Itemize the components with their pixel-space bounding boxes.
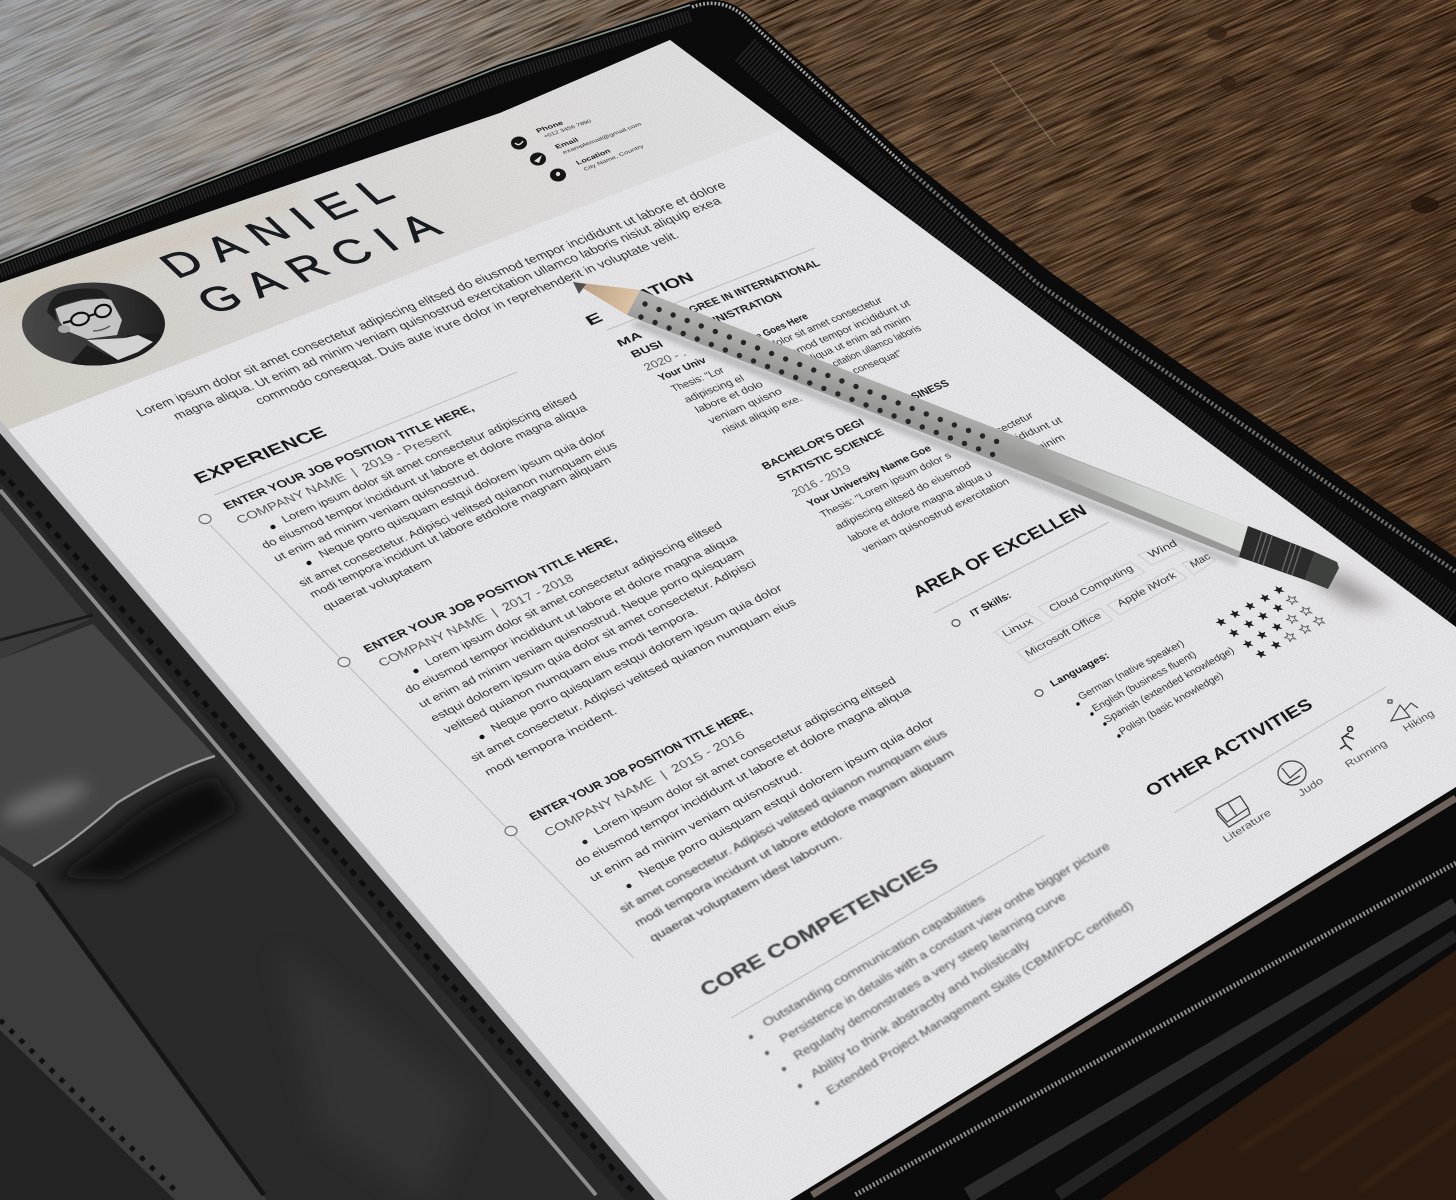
- heading: other activities: OTHER ACTIVITIES: [1142, 695, 1317, 800]
- bachelor's degree entry: adipiscing elitsed do eiusmod: [832, 460, 974, 532]
- job entry 2: ENTER YOUR JOB POSITION TITLE HERE,: [361, 533, 620, 655]
- intro paragraph: [133, 179, 729, 422]
- heading: core competencies: CORE COMPETENCIES: [696, 854, 943, 1001]
- activity labels: [1221, 707, 1437, 845]
- contact text: [535, 118, 646, 172]
- experience section: modi tempora incidunt ut labore etdolore magnam aliquam: [307, 454, 614, 600]
- bachelor's degree entry: veniam quisnostrud exercitation: [859, 476, 1011, 555]
- master's degree entry: Thesis: "Lor: [669, 365, 727, 394]
- portrait face: [55, 298, 122, 339]
- master's degree entry: 2020 - .: [641, 347, 689, 373]
- pencil eraser: [1305, 552, 1339, 589]
- text: Lorem ipsum dolor sit amet consectetur adipiscing elitsed: [279, 390, 580, 525]
- pencil shadow: [630, 320, 1393, 608]
- education section: [582, 257, 1068, 555]
- zipper edge: [0, 5, 690, 263]
- job entry 2: modi tempora incident.: [482, 705, 620, 778]
- core competencies section: [696, 840, 1136, 1105]
- master's degree entry: dolor sit amet consectetur: [768, 295, 885, 350]
- icon: location: [550, 168, 566, 182]
- paper underside edge: [812, 798, 1456, 1195]
- job entry 3: ut enim ad minim veniam quisnostrud.: [587, 764, 804, 884]
- master's degree entry: MA: [614, 329, 645, 349]
- experience section: Lorem ipsum dolor sit amet consectetur adipiscing elitsed: [422, 520, 725, 668]
- zipper fabric top: [0, 16, 690, 272]
- pencil barrel: [627, 290, 1249, 558]
- text: sit amet consectetur. Adipisci velitsed quianon numquam eius: [296, 439, 620, 589]
- skill pills: Microsoft Office: [1023, 610, 1103, 659]
- activity labels: Literature: [1221, 807, 1274, 845]
- bachelor's degree entry: labore et dolore magna aliqua u: [845, 467, 994, 544]
- skill pills: Apple iWork: [1114, 569, 1179, 609]
- master's degree entry: nisiut aliquip exe.: [719, 393, 804, 436]
- bachelor's degree entry: [760, 378, 1068, 555]
- activity labels: Running: [1342, 738, 1390, 770]
- job entry 2: [361, 520, 799, 778]
- master's degree entry: labore et dolo: [692, 378, 766, 415]
- zipper teeth: [692, 3, 906, 167]
- heading: education: ATION: [634, 269, 697, 303]
- bachelor's degree entry: cididunt ut: [1008, 415, 1066, 445]
- bachelor's degree entry: minim: [1031, 431, 1068, 454]
- skill pills: [994, 537, 1215, 663]
- master's degree entry: MINISTRATION: [702, 290, 785, 330]
- experience section: sit amet consectetur. Adipisci velitsed quianon numquam eius: [468, 596, 799, 764]
- bachelor's degree entry: nsectetur: [987, 410, 1036, 439]
- icon: judo: [1278, 761, 1306, 785]
- heading: education: E: [582, 310, 607, 329]
- experience section: do eiusmod tempor incididunt ut labore et dolore magna aliqua: [402, 532, 740, 696]
- skill pills: Wind: [1145, 537, 1180, 560]
- area of excellence section: [909, 501, 1326, 738]
- job entry 3: [527, 674, 957, 944]
- timeline dots: [199, 514, 517, 836]
- competencies list: [749, 840, 1136, 1105]
- portrait jacket: [70, 334, 162, 366]
- bachelor's degree entry: Thesis: "Lorem ipsum dolor s: [817, 450, 954, 520]
- star ratings: [1213, 584, 1326, 659]
- header band: [0, 40, 785, 433]
- left leather panels: [0, 418, 690, 1200]
- bullet circles: [952, 620, 1043, 696]
- master's degree entry: lo consequat": [839, 347, 905, 380]
- profile photo: [22, 282, 165, 366]
- bachelor's degree entry: STATISTIC SCIENCE: [775, 427, 887, 484]
- master's degree entry: usmod tempor incididunt ut: [783, 298, 913, 360]
- competencies list: Outstanding communication capabilities: [760, 892, 988, 1029]
- portrait mouth: [93, 326, 110, 331]
- portrait hair: [47, 288, 112, 322]
- job entry 1: COMPANY NAME | 2019 - Present: [234, 427, 454, 526]
- master's degree entry: BUSI: [628, 338, 666, 360]
- heading: experience: EXPERIENCE: [190, 424, 331, 487]
- skill pills: Linux: [999, 615, 1036, 639]
- portrait glasses: [63, 303, 112, 327]
- experience section: Neque porro quisquam estqui dolorem ipsum quia dolor: [316, 428, 609, 560]
- languages list: English (business fluent): [1090, 649, 1199, 714]
- lower zipper: [855, 863, 1456, 1195]
- master's degree entry: veniam quisno: [705, 386, 784, 426]
- text: Neque porro quisquam estqui dolorem ipsum quia dolor: [636, 714, 937, 880]
- other activities section: [1142, 695, 1437, 845]
- skill pills: Mac: [1187, 550, 1213, 570]
- activity labels: Judo: [1295, 774, 1326, 799]
- activity labels: Hiking: [1400, 707, 1437, 734]
- master's degree entry: citation ullamco laboris: [830, 323, 924, 370]
- master's degree entry: ne Goes Here: [748, 311, 811, 344]
- job entry 3: COMPANY NAME | 2015 - 2016: [542, 729, 748, 839]
- name: GARCIA: [187, 202, 464, 322]
- contact text: City Name, Country: [582, 143, 646, 172]
- bachelor's degree entry: BACHELOR'S DEGI: [760, 417, 867, 472]
- languages list: Spanish (extended knowledge): [1101, 645, 1237, 725]
- experience section: ut enim ad minim veniam quisnostrud. Neque porro quisquam: [416, 546, 747, 710]
- languages list: Languages:: [1047, 649, 1111, 689]
- name: [150, 166, 464, 322]
- portrait shirt: [87, 335, 153, 360]
- icon: hiking mountain: [1388, 700, 1418, 721]
- contact text: examplemail@gmail.com: [561, 122, 643, 156]
- pencil ferrule: [1239, 526, 1315, 580]
- job entry 1: quaerat voluptatem: [321, 556, 435, 613]
- competencies list: Regularly demonstrates a very steep learning curve: [791, 890, 1069, 1062]
- master's degree entry: [614, 257, 924, 436]
- job entry 1: [221, 390, 620, 613]
- contact details: [511, 118, 646, 182]
- master's degree entry: Your Univ: [656, 355, 709, 383]
- skill pills: Cloud Computing: [1047, 563, 1136, 615]
- contact text: Email: [554, 136, 582, 151]
- pencil: [573, 282, 1393, 608]
- text: modi tempora incidunt ut labore etdolore magnam aliquam: [632, 747, 957, 929]
- job entry 1: ut enim ad minim veniam quisnostrud.: [271, 465, 482, 564]
- text: Lorem ipsum dolor sit amet consectetur adipiscing elitsed: [591, 674, 899, 837]
- icon: phone: [511, 136, 527, 150]
- text: do eiusmod tempor incididunt ut labore et dolore magna aliqua: [259, 402, 590, 551]
- pencil grip dots: [641, 304, 998, 455]
- zipper fabric right: [745, 50, 1456, 612]
- job entry 3: ENTER YOUR JOB POSITION TITLE HERE,: [527, 705, 755, 823]
- name: DANIEL: [150, 166, 416, 285]
- master's degree entry: adipiscing el: [681, 372, 747, 405]
- IT skills label: IT Skills:: [967, 590, 1014, 619]
- pencil wood tip: [573, 282, 640, 315]
- languages list: German (native speaker): [1076, 638, 1187, 702]
- bachelor's degree entry: Your University Name Goe: [805, 443, 934, 509]
- section rules: [210, 248, 1386, 1018]
- master's degree entry: EGREE IN INTERNATIONAL: [679, 257, 823, 318]
- icon: literature book: [1216, 796, 1250, 827]
- contact text: Location: [575, 148, 613, 167]
- bachelor's degree entry: 2016 - 2019: [789, 462, 853, 499]
- pencil lead: [573, 282, 586, 294]
- master's degree entry: aliqua ut enim ad minim: [803, 314, 914, 365]
- icon: running: [1340, 726, 1354, 750]
- bachelor's degree entry: USINESS: [901, 378, 952, 405]
- languages list: Polish (basic knowledge): [1117, 670, 1226, 737]
- contact text: +012 3456 7890: [542, 118, 594, 139]
- heading: area of excellence: AREA OF EXCELLEN: [909, 501, 1091, 601]
- job entry 3: quaerat voluptatem idest laborum.: [647, 830, 845, 944]
- languages list: [1047, 638, 1237, 738]
- job entry 2: velitsed quianon numquam eius modi tempora.: [441, 605, 701, 736]
- job entry 1: ENTER YOUR JOB POSITION TITLE HERE,: [221, 402, 477, 512]
- experience section: estqui dolorem ipsum quia dolor sit amet consectetur. Adipisci: [428, 557, 759, 724]
- competencies list: Ability to think abstractly and holistically: [808, 937, 1033, 1080]
- heading: education: [582, 269, 697, 329]
- experience section: [190, 390, 957, 944]
- experience section: Neque porro quisquam estqui dolorem ipsum quia dolor: [488, 582, 785, 734]
- job entry 2: COMPANY NAME | 2017 - 2018: [375, 571, 577, 669]
- contact text: Phone: [535, 120, 566, 135]
- icon: email: [530, 152, 546, 166]
